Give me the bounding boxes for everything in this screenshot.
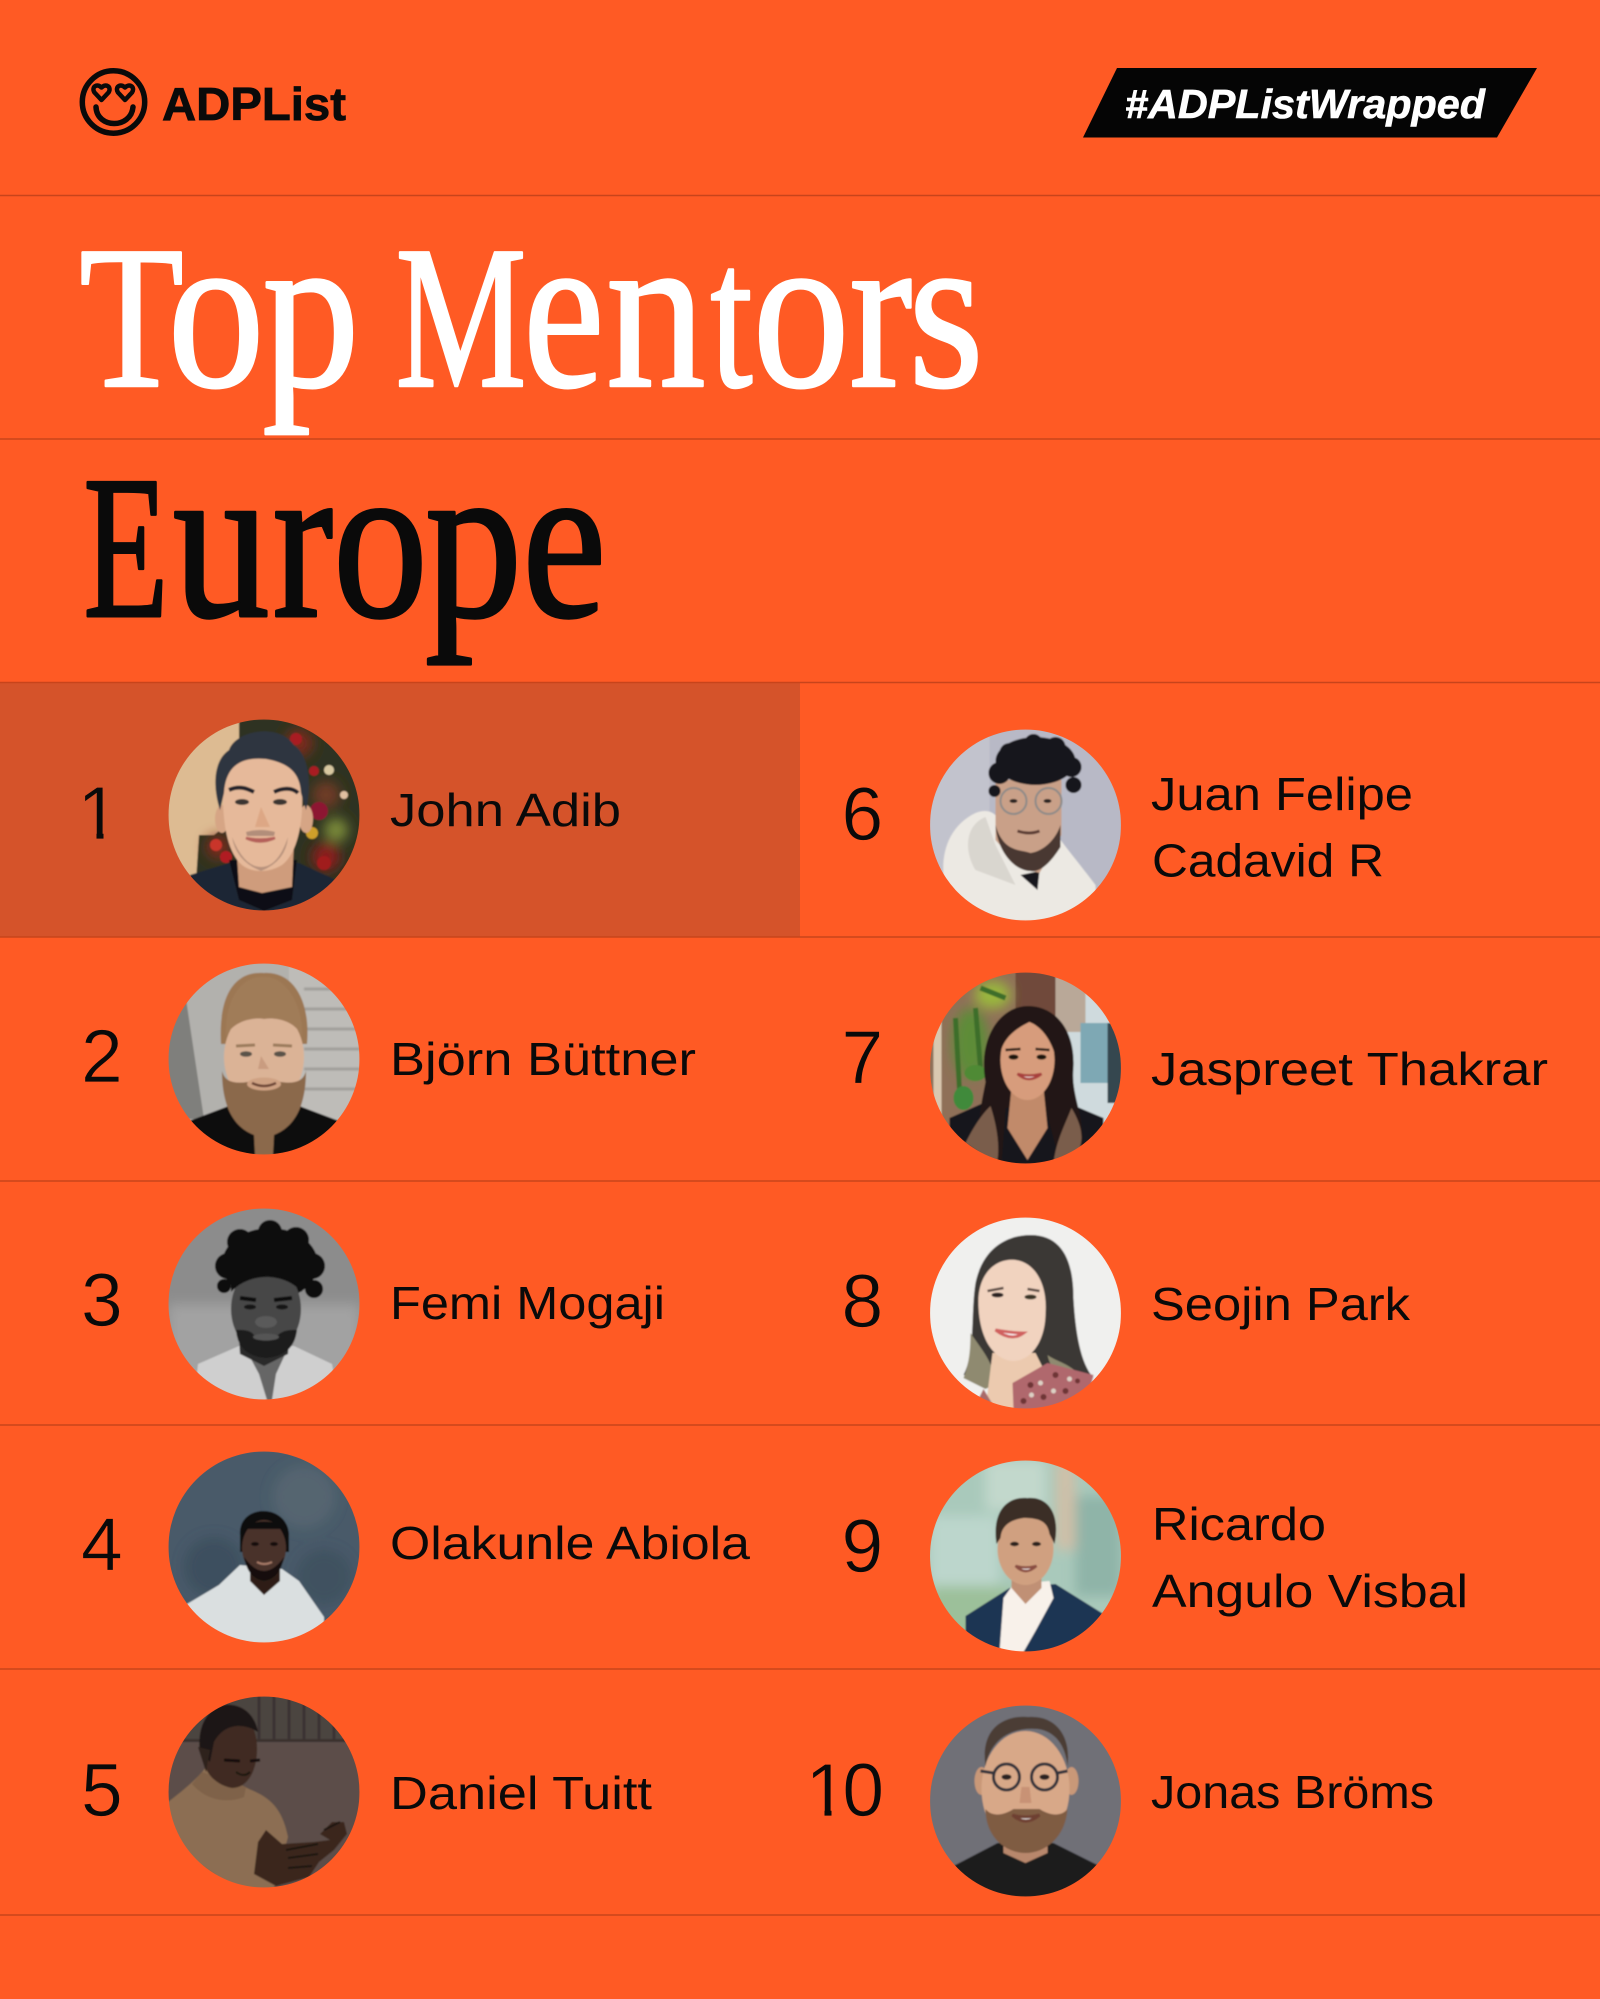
name: Jonas Bröms: [1151, 1766, 1434, 1818]
rank number 6: 6: [842, 772, 883, 856]
heading: Europe: o: [333, 415, 428, 665]
name: Daniel Tuitt: [390, 1767, 652, 1819]
row: rank 3 Femi Mogaji: [81, 1208, 665, 1400]
portrait: Olakunle Abiola: [168, 1451, 360, 1643]
heading: Europe: u: [173, 415, 270, 665]
portrait: Björn Büttner: [168, 963, 360, 1155]
title: Top Mentors: p: [262, 185, 360, 435]
row: rank 6 Juan Felipe Cadavid R: [842, 729, 1413, 921]
heading: Europe: r: [273, 415, 333, 665]
rank number 2: 2: [81, 1014, 123, 1098]
logo: ADPList: [82, 71, 346, 133]
rank number 8: 8: [842, 1259, 883, 1343]
logo wordmark: ADPList: [162, 78, 346, 130]
row: rank 10 Jonas Bröms: [806, 1705, 1434, 1897]
name: Cadavid R: [1152, 834, 1384, 886]
title: Top Mentors: s: [908, 185, 984, 435]
title: Top Mentors: o: [753, 185, 850, 435]
highlight behind rank 1: [0, 683, 800, 937]
name: [1151, 768, 1413, 886]
icon: smiley with heart eyes: [82, 71, 145, 133]
hashtag badge: [1083, 68, 1537, 138]
name: John Adib: [390, 784, 621, 836]
row: rank 4 Olakunle Abiola: [81, 1451, 750, 1643]
portrait: Seojin Park: [930, 1217, 1122, 1409]
portrait: Ricardo Angulo Visbal: [930, 1460, 1122, 1652]
portrait: Jaspreet Thakrar: [930, 972, 1122, 1164]
name: Olakunle Abiola: [390, 1517, 750, 1569]
rank number 1: 1: [78, 771, 119, 855]
portrait: John Adib: [168, 719, 360, 911]
title: Top Mentors: r: [849, 185, 912, 435]
row: rank 9 Ricardo Angulo Visbal: [842, 1460, 1468, 1652]
title: Top Mentors: o: [168, 185, 265, 435]
row: rank 5 Daniel Tuitt: [81, 1696, 652, 1888]
portrait: Jonas Bröms: [930, 1705, 1122, 1897]
row: rank 8 Seojin Park: [842, 1217, 1411, 1409]
name: Femi Mogaji: [390, 1277, 665, 1329]
name: Angulo Visbal: [1152, 1565, 1468, 1617]
heading: Europe: p: [425, 415, 522, 665]
rank number 5: 5: [81, 1748, 123, 1832]
rank number 3: 3: [81, 1258, 123, 1342]
hashtag badge: #ADPListWrapped: [1125, 81, 1486, 127]
title: Top Mentors: e: [523, 185, 604, 435]
portrait: Femi Mogaji: [168, 1208, 360, 1400]
heading: Europe: E: [84, 435, 168, 661]
heading: Europe: e: [522, 415, 606, 665]
row: rank 7 Jaspreet Thakrar: [842, 972, 1548, 1164]
rank number 9: 9: [842, 1504, 883, 1588]
name: Jaspreet Thakrar: [1151, 1043, 1548, 1095]
rank number 4: 4: [81, 1502, 123, 1586]
title: Top Mentors: n: [606, 185, 706, 435]
name: Ricardo: [1152, 1498, 1326, 1550]
rank number 10: 1: [806, 1748, 847, 1832]
title: Top Mentors: T: [79, 205, 184, 431]
row: rank 1 John Adib: [78, 719, 621, 911]
name: [1152, 1498, 1468, 1617]
title: Top Mentors: t: [710, 202, 753, 431]
row: rank 2 Björn Büttner: [81, 963, 696, 1155]
name: Juan Felipe: [1151, 768, 1413, 820]
portrait: Daniel Tuitt: [168, 1696, 360, 1888]
title: Top Mentors: M: [396, 205, 526, 431]
rank number 10: 0: [842, 1748, 884, 1832]
rank number 7: 7: [842, 1015, 883, 1099]
name: Björn Büttner: [390, 1033, 696, 1085]
portrait: Juan Felipe Cadavid R: [930, 729, 1122, 921]
name: Seojin Park: [1151, 1278, 1411, 1330]
